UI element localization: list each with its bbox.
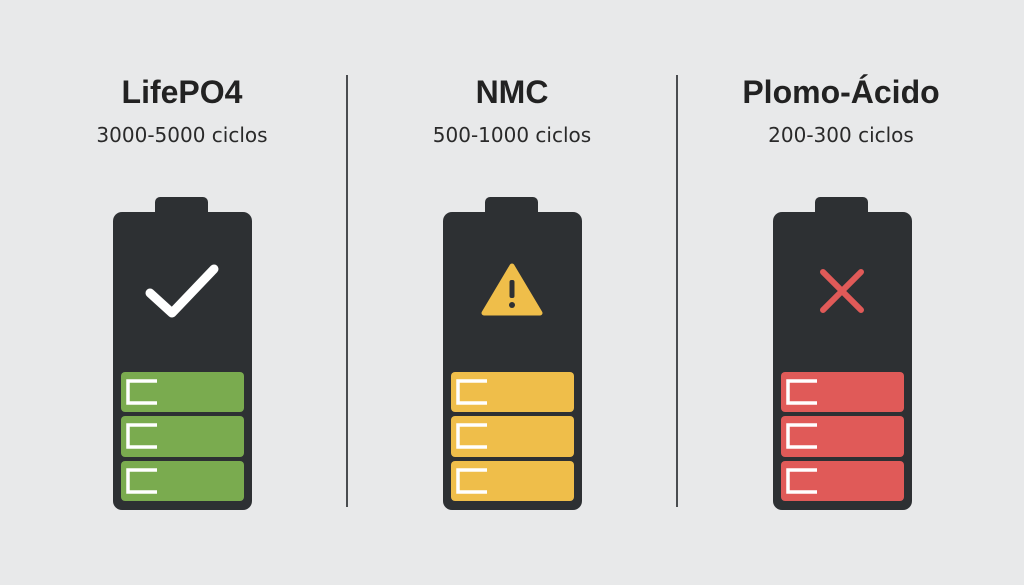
title: NMC: NMC (476, 74, 548, 110)
battery: NMC (443, 197, 582, 510)
subtitle: LifePO4 cycles: 3000-5000 ciclos (96, 123, 268, 147)
battery: LifePO4 (113, 197, 252, 510)
title: LifePO4: LifePO4 (122, 74, 242, 110)
subtitle: Plomo-Ácido cycles: 200-300 ciclos (768, 123, 914, 147)
battery: Plomo-Ácido (773, 197, 912, 510)
icon: cross (823, 272, 861, 310)
icon: check (150, 269, 214, 313)
title: Plomo-Ácido: Plomo-Ácido (742, 74, 940, 110)
subtitle: NMC cycles: 500-1000 ciclos (433, 123, 591, 147)
icon: warning (484, 266, 540, 313)
